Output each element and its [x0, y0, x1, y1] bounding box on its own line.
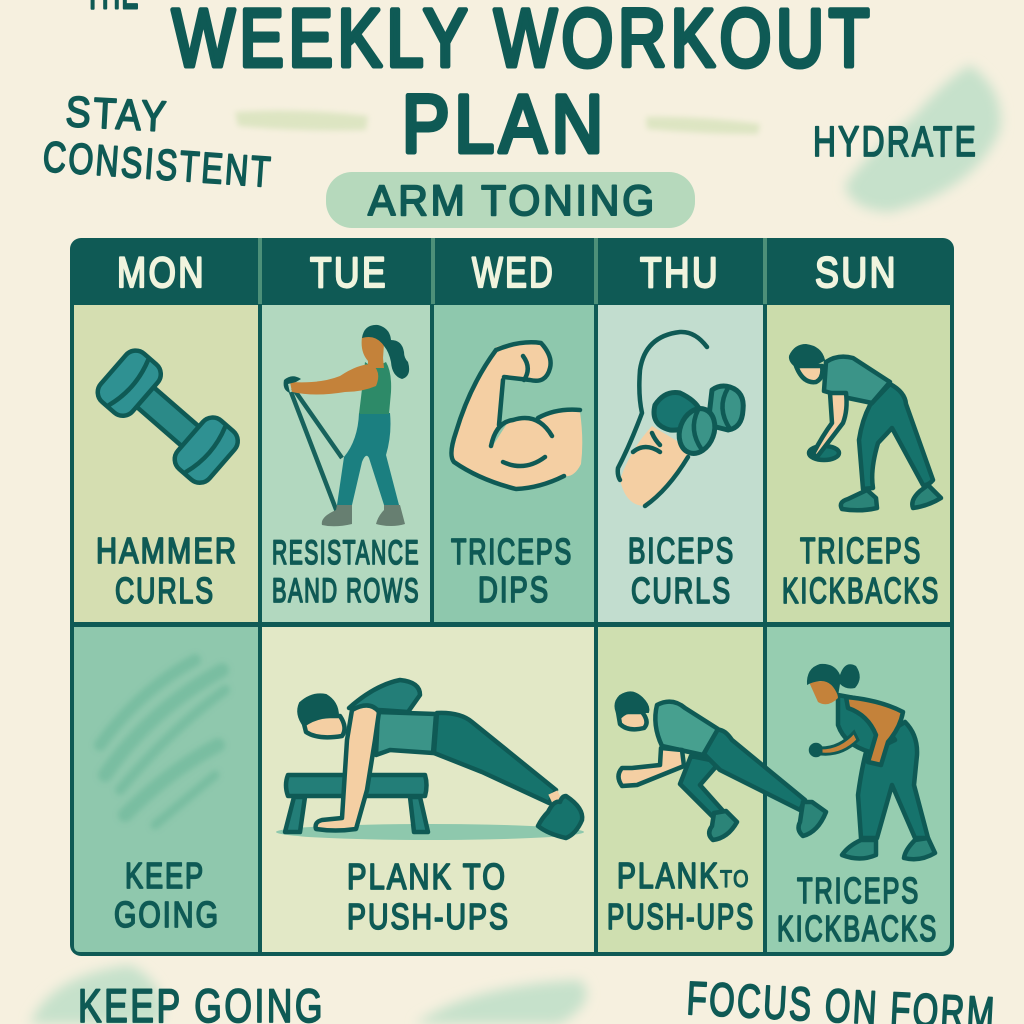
header: tue: TUE	[310, 249, 388, 297]
head	[809, 680, 838, 704]
hand	[620, 426, 692, 506]
ankle	[548, 790, 562, 804]
label: triceps dips: DIPS	[478, 569, 550, 610]
label: keep going: GOING	[114, 894, 220, 935]
label: plank to push-ups alternate: PUSH-UPS	[607, 896, 755, 937]
label: triceps kickbacks: TRICEPS	[800, 530, 922, 571]
label: triceps dips: TRICEPS	[451, 531, 573, 572]
icon: biceps curl with dumbbells	[618, 332, 743, 506]
figure: woman doing triceps kickback	[807, 664, 935, 859]
shoes	[538, 796, 582, 838]
cord and arm lines	[618, 332, 707, 506]
brush smudge: top left streak	[235, 111, 368, 130]
label: plank to push-ups: PUSH-UPS	[347, 896, 510, 937]
header: wed: WED	[472, 249, 555, 297]
icon: flexed arm	[451, 342, 582, 489]
figure: woman with resistance band	[284, 325, 409, 526]
weight	[811, 745, 821, 755]
brush smudge: bottom center	[415, 980, 587, 1024]
label: resistance band rows	[272, 534, 420, 610]
shirt	[824, 357, 890, 403]
label: triceps kickbacks	[782, 530, 940, 611]
shoes	[842, 838, 935, 859]
figure: plank on bench	[276, 680, 584, 840]
label: biceps curls: CURLS	[631, 570, 732, 611]
front arm	[821, 732, 858, 754]
back leg	[704, 730, 805, 810]
label: biceps curls: BICEPS	[628, 530, 735, 571]
label: plank to push-ups alternate: PLANK	[617, 855, 720, 896]
brush smudge: bottom left	[30, 965, 162, 1024]
label: biceps curls	[628, 530, 735, 611]
label: triceps kickbacks lower: TRICEPS	[797, 870, 920, 911]
head	[790, 345, 824, 382]
pants	[859, 384, 933, 489]
brush marks: rest panel	[100, 660, 225, 825]
hair and ponytail	[362, 325, 409, 379]
front leg	[680, 756, 724, 816]
hand	[284, 376, 301, 393]
label: resistance band rows: RESISTANCE	[272, 534, 420, 572]
label: plank to push-ups alternate: TO	[720, 866, 750, 893]
brush smudge: behind hydrate	[845, 65, 1001, 212]
weekly grid	[70, 238, 954, 956]
torso	[376, 712, 436, 755]
side note: stay consistent: STAY	[64, 88, 170, 141]
legs	[434, 713, 556, 803]
label: hammer curls: CURLS	[115, 570, 215, 611]
side note: stay consistent: CONSISTENT	[41, 133, 274, 197]
label: triceps kickbacks lower	[777, 870, 938, 949]
label: plank to push-ups	[347, 856, 510, 937]
label: keep going	[114, 855, 220, 935]
arm	[618, 748, 684, 786]
backpack	[349, 680, 420, 712]
label: hammer curls	[96, 530, 238, 611]
title: PLAN	[402, 79, 608, 170]
back shoe	[799, 802, 826, 836]
subtitle pill: arm toning: ARM TONING	[368, 177, 657, 225]
figure: man lunging	[616, 692, 826, 840]
arm	[290, 364, 378, 394]
bench	[285, 775, 428, 832]
legs	[858, 722, 928, 838]
floor shadow	[276, 824, 584, 840]
side note: stay consistent	[41, 88, 274, 197]
label: triceps dips	[451, 531, 573, 610]
icon: dumbbell	[92, 345, 243, 488]
band	[291, 388, 342, 512]
figure: man doing triceps kickback	[790, 345, 941, 510]
shoes	[841, 485, 941, 510]
header: sun: SUN	[815, 249, 898, 297]
arm	[316, 705, 379, 830]
brush smudge: top right streak	[646, 117, 760, 134]
label: plank to push-ups alternate	[607, 855, 755, 937]
header: thu: THU	[640, 249, 720, 297]
arm	[846, 697, 903, 765]
title	[85, 0, 874, 170]
shirt	[655, 702, 718, 755]
torso	[359, 362, 391, 414]
head	[616, 692, 648, 729]
head	[362, 334, 384, 368]
head	[298, 694, 345, 737]
front shoe	[709, 811, 737, 840]
arm	[813, 393, 847, 457]
hair and ponytail	[807, 664, 860, 696]
torso	[838, 695, 895, 752]
header: mon: MON	[117, 249, 206, 297]
label: plank to push-ups: PLANK TO	[347, 856, 507, 897]
grid panels background	[70, 238, 954, 956]
label: resistance band rows: BAND ROWS	[272, 572, 420, 610]
label: triceps kickbacks: KICKBACKS	[782, 570, 940, 611]
label: hammer curls: HAMMER	[96, 530, 238, 571]
label: keep going: KEEP	[125, 855, 205, 896]
pants	[337, 413, 399, 505]
shoes	[322, 505, 405, 526]
label: triceps kickbacks lower: KICKBACKS	[777, 908, 938, 949]
dumbbell weights	[708, 386, 743, 430]
dumbbell	[809, 446, 839, 460]
